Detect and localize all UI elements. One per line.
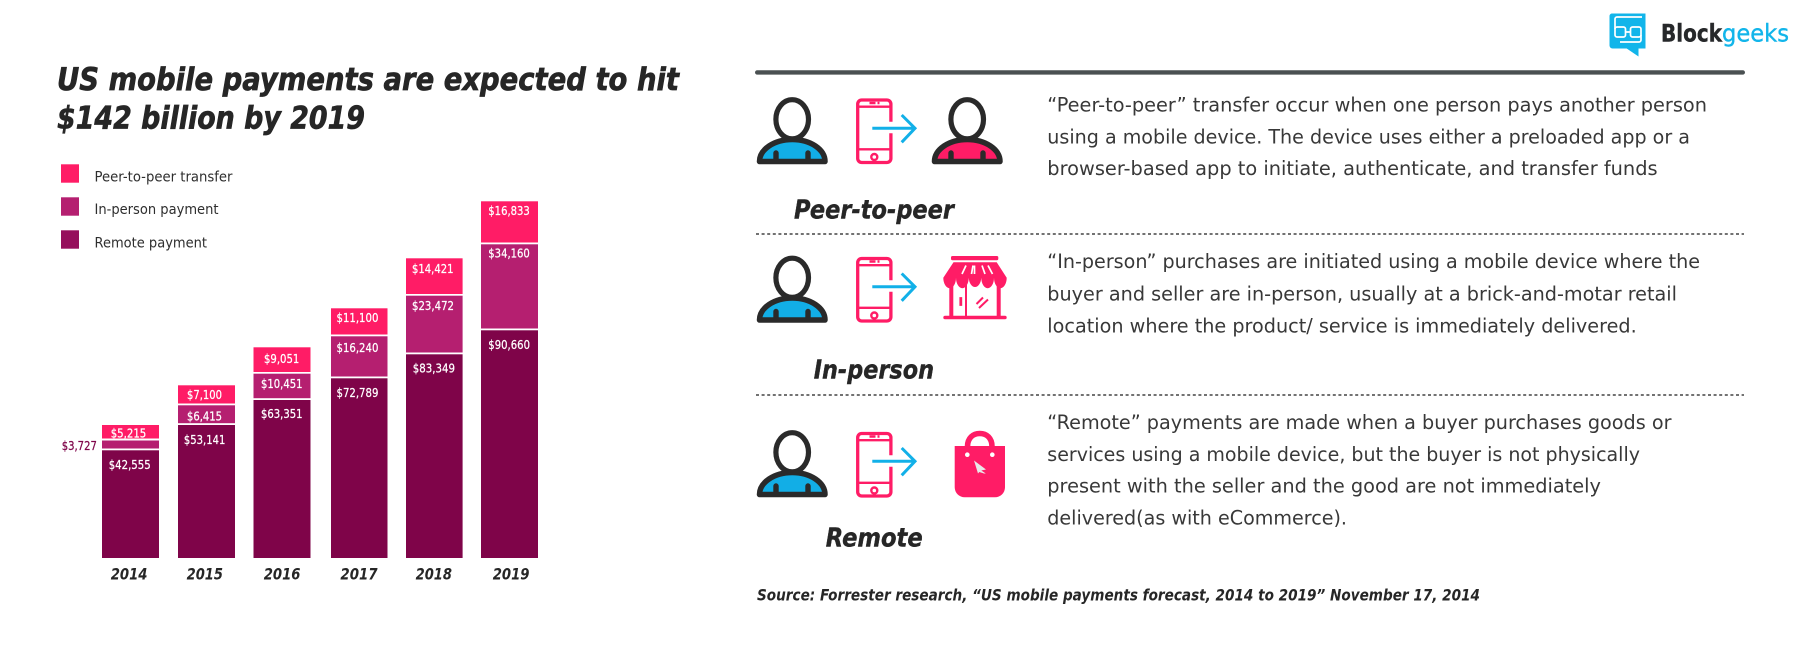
text: peer-to-peer description: using a mobile device. The device uses either a preloaded app or a [1047, 125, 1690, 148]
icon: storefront [943, 256, 1007, 319]
logo wordmark: Block [1661, 20, 1723, 48]
bar 2014: $3,727 [62, 439, 97, 453]
bar 2015: $7,100 [187, 388, 222, 402]
text: in-person description: location where the product/ service is immediately delivered. [1047, 314, 1637, 338]
bar 2016: 2016 [264, 564, 300, 583]
bar 2019: 2019 [493, 564, 530, 583]
text: in-person description: buyer and seller are in-person, usually at a brick-and-motar retail [1047, 282, 1677, 306]
icon: phone with arrow [858, 434, 915, 496]
bar 2016: $10,451 [261, 377, 302, 391]
text: remote description: delivered(as with eCommerce). [1047, 506, 1347, 529]
bar 2014: $42,555 [109, 458, 151, 472]
source note: Source: Forrester research, “US mobile payments forecast, 2014 to 2019” November 17, 2014 [757, 587, 1480, 605]
bar 2014 [62, 425, 159, 583]
bar 2015: $6,415 [187, 410, 222, 424]
icon: buyer person [760, 433, 825, 494]
bar 2016: $63,351 [261, 407, 302, 421]
bar 2019: $90,660 [488, 338, 530, 352]
text: peer-to-peer description: browser-based app to initiate, authenticate, and transfer funds [1047, 157, 1658, 180]
icon: buyer person [760, 258, 825, 320]
icon: phone with arrow [858, 258, 915, 321]
icon: shopping bag [955, 434, 1005, 497]
heading: In-person: In-person [814, 355, 934, 385]
panel: in-person [760, 250, 1700, 385]
panel: peer-to-peer [760, 94, 1707, 225]
bar 2018: 2018 [416, 564, 452, 583]
bar 2019 [481, 201, 538, 583]
bar 2017 [331, 308, 388, 583]
legend: Remote payment [94, 235, 207, 251]
bar 2017: $72,789 [336, 386, 378, 400]
icon: phone with arrow [858, 100, 915, 162]
icon: sender person [760, 100, 825, 162]
bar 2016 [254, 347, 310, 583]
text: in-person description: “In-person” purchases are initiated using a mobile device where the [1047, 250, 1700, 273]
bar 2015 [178, 385, 235, 583]
legend [61, 164, 233, 251]
text: remote description: present with the seller and the good are not immediately [1047, 475, 1601, 498]
legend: Peer-to-peer transfer [94, 170, 233, 186]
text: in-person description [1047, 250, 1700, 338]
heading: Remote: Remote [826, 524, 923, 554]
text: remote description: “Remote” payments are made when a buyer purchases goods or [1047, 411, 1672, 434]
bar 2017: 2017 [340, 564, 378, 583]
bar 2018: $23,472 [412, 299, 454, 313]
bar 2015: $53,141 [184, 433, 225, 447]
bar 2018: $83,349 [413, 362, 455, 376]
bar 2016: $9,051 [264, 352, 299, 366]
heading: Peer-to-peer: Peer-to-peer [794, 195, 955, 225]
title [57, 62, 680, 136]
bar 2018 [406, 258, 463, 583]
bar 2017: $16,240 [336, 341, 378, 355]
title: $142 billion by 2019 [57, 100, 365, 136]
title: US mobile payments are expected to hit [57, 62, 680, 98]
bar 2014: 2014 [111, 564, 148, 583]
stacked bar chart [62, 201, 538, 583]
bar 2014: $5,215 [111, 427, 146, 441]
logo: Blockgeeks [1610, 14, 1789, 56]
logo wordmark accent: geeks [1722, 20, 1789, 48]
bar 2015: 2015 [187, 564, 223, 583]
text: remote description [1047, 411, 1672, 529]
bar 2019: $16,833 [488, 204, 530, 218]
text: remote description: services using a mobile device, but the buyer is not physically [1047, 443, 1640, 466]
text: peer-to-peer description: “Peer-to-peer” transfer occur when one person pays another person [1047, 94, 1707, 117]
text: peer-to-peer description [1047, 94, 1707, 180]
bar 2018: $14,421 [412, 262, 454, 276]
bar 2019: $34,160 [488, 247, 530, 261]
icon: speech bubble with glasses [1610, 14, 1646, 56]
icon: recipient person [934, 100, 1000, 162]
panel: remote [760, 411, 1672, 554]
legend: In-person payment [94, 202, 219, 218]
bar 2017: $11,100 [336, 311, 378, 325]
